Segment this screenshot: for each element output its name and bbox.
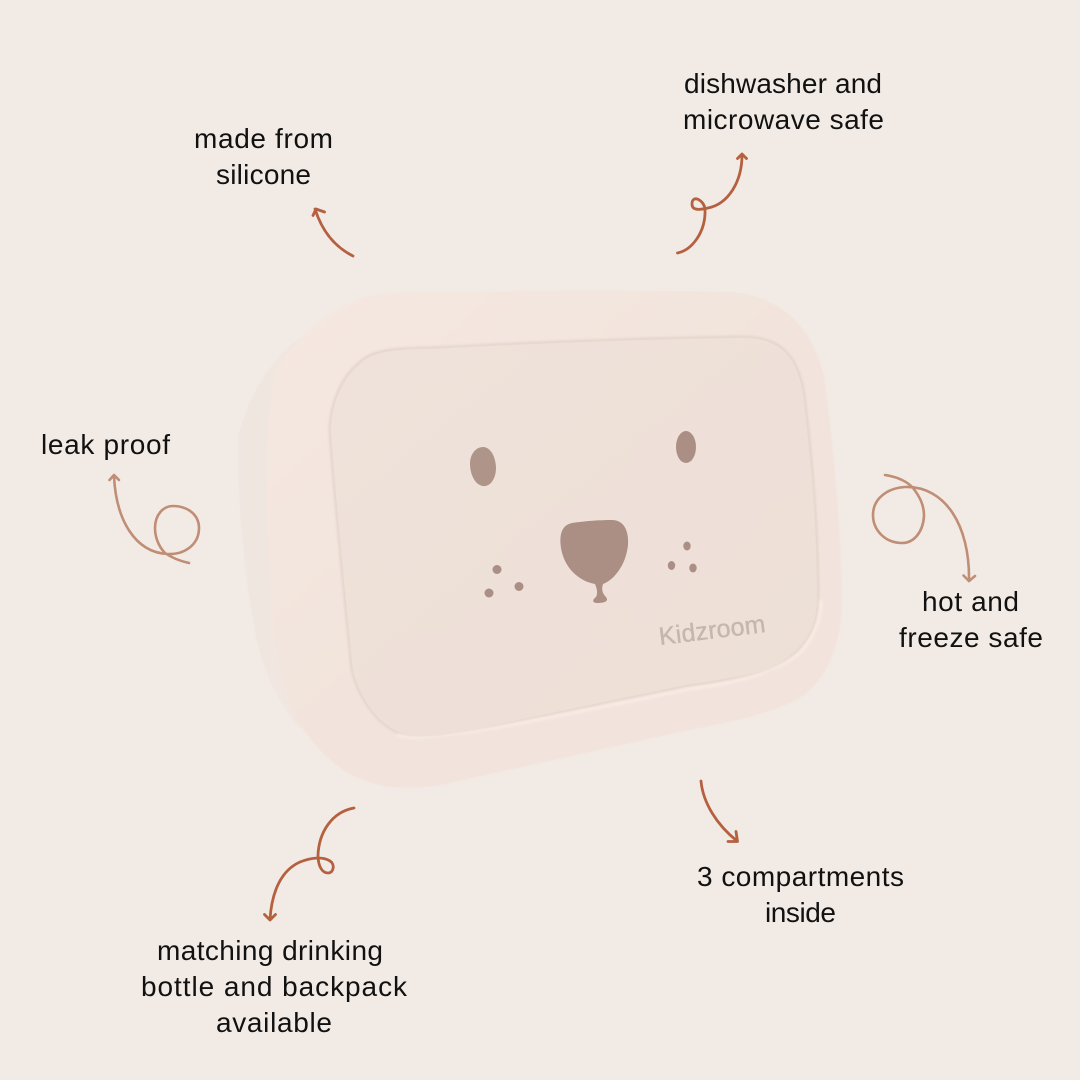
label: made from silicone [194, 123, 333, 190]
label: made from silicone: silicone [216, 159, 311, 190]
right eye [676, 431, 696, 463]
nose [560, 520, 628, 603]
label: leak proof: leak proof [41, 429, 170, 460]
lid centre panel [331, 338, 817, 736]
label: 3 compartments inside: inside [765, 897, 836, 928]
left eye [470, 447, 496, 486]
label: 3 compartments inside: 3 compartments [697, 861, 904, 892]
brand logo: Kidzroom [657, 610, 767, 651]
arrow: hot and freeze [873, 475, 975, 581]
label: dishwasher and microwave safe [683, 68, 884, 135]
left whisker dots [484, 565, 524, 598]
label: dishwasher and microwave safe: dishwasher and [684, 68, 882, 99]
label: hot and freeze safe [899, 586, 1043, 653]
arrow: matching products [264, 808, 354, 920]
label: made from silicone: made from [194, 123, 333, 154]
right whisker dots [668, 542, 697, 572]
arrow: silicone [313, 209, 353, 256]
lid recess shadow [330, 337, 818, 737]
arrow: dishwasher [678, 154, 746, 253]
label: matching drinking bottle and backpack available: matching drinking [157, 935, 383, 966]
label: 3 compartments inside [697, 861, 904, 928]
label: hot and freeze safe: hot and [922, 586, 1019, 617]
label: matching drinking bottle and backpack available: bottle and backpack [141, 971, 408, 1002]
label: dishwasher and microwave safe: microwave safe [683, 104, 884, 135]
label: matching drinking bottle and backpack available: available [216, 1007, 332, 1038]
product: lunch box [238, 290, 842, 788]
label: hot and freeze safe: freeze safe [899, 622, 1043, 653]
label: matching drinking bottle and backpack available [141, 935, 408, 1038]
box lid [266, 290, 842, 788]
arrow: compartments [701, 781, 738, 842]
lid bottom highlight [397, 600, 821, 738]
arrow: leak proof [110, 475, 199, 563]
box body side [238, 338, 345, 728]
